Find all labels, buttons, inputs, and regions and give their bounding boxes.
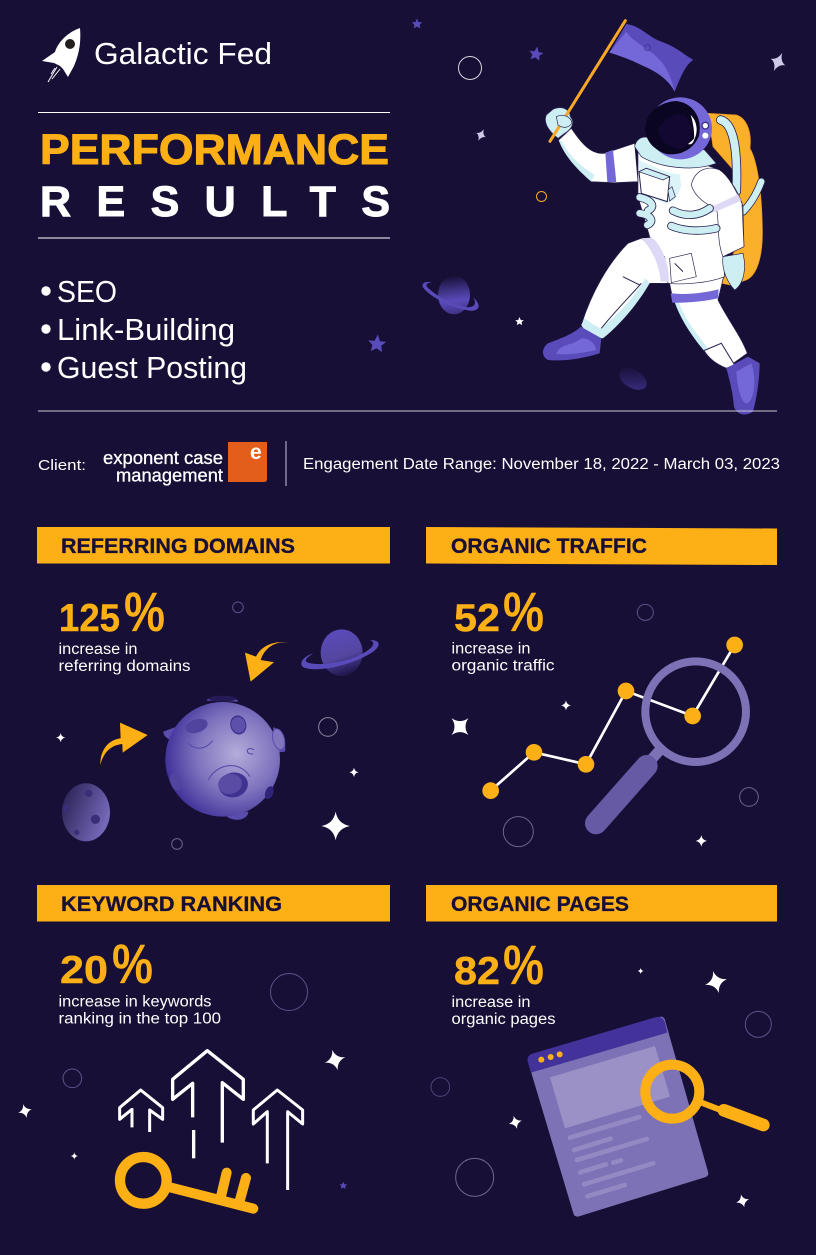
service list: Guest Posting	[57, 350, 247, 385]
client logo: exponent case management	[103, 441, 267, 486]
front boot	[543, 327, 601, 360]
illustration: astronaut	[543, 21, 762, 414]
heading	[426, 527, 777, 565]
line chart with magnifier	[443, 604, 758, 847]
fingers	[556, 115, 572, 127]
description: ranking in the top 100	[58, 1010, 221, 1028]
rising arrows	[120, 1051, 303, 1190]
stat: 20%: 20	[60, 949, 108, 992]
stat: 20%	[60, 932, 153, 995]
page body	[532, 1021, 704, 1213]
client logo: exponent case management: management	[116, 466, 223, 486]
panel: organic pages	[426, 885, 777, 1213]
title	[40, 126, 390, 226]
air tubes	[721, 120, 737, 192]
service list	[41, 274, 247, 385]
stat: 125%	[59, 580, 165, 643]
sparkles	[56, 733, 359, 840]
torso	[638, 147, 744, 284]
description: increase in	[58, 641, 138, 658]
small circles	[503, 604, 758, 847]
stat: 52%	[454, 580, 544, 643]
arrow: from asteroid	[100, 723, 148, 765]
illustration: web page with magnifier	[431, 968, 771, 1213]
heading: ORGANIC PAGES	[451, 893, 629, 916]
client row	[38, 441, 780, 486]
raised arm	[559, 128, 638, 183]
heading: KEYWORD RANKING	[61, 893, 282, 916]
logo: Galactic Fed	[42, 28, 272, 82]
description: organic pages	[452, 1011, 556, 1028]
client label: Client:	[38, 457, 86, 474]
chest straps	[640, 197, 716, 231]
sparkles	[507, 968, 751, 1209]
sparkles	[16, 1047, 348, 1189]
logo wordmark: Galactic Fed	[94, 36, 272, 71]
stat: 52%: %	[503, 580, 544, 643]
small asteroid	[62, 783, 110, 841]
back leg	[670, 275, 747, 368]
sparkles	[443, 700, 707, 847]
heading: REFERRING DOMAINS	[61, 535, 295, 558]
stat: 82%: %	[503, 933, 544, 996]
panel: organic traffic	[426, 527, 777, 847]
icon: magnifier	[645, 1065, 763, 1125]
faint planet	[616, 364, 650, 394]
service list: SEO	[57, 274, 117, 309]
moon	[163, 696, 287, 820]
ringed planet	[301, 629, 379, 676]
collar	[635, 137, 716, 168]
backpack	[708, 113, 762, 285]
flag	[609, 24, 693, 92]
title: PERFORMANCE	[40, 126, 389, 174]
lower glove	[723, 253, 745, 290]
description	[58, 641, 191, 675]
illustration: arrows and key	[16, 1047, 348, 1209]
arrow: from planet	[245, 642, 292, 682]
illustration: planets and arrows	[56, 602, 379, 849]
page header	[528, 1017, 667, 1073]
icon: key	[120, 1157, 253, 1209]
stat: 125%: 125	[59, 597, 120, 640]
page text lines	[570, 1117, 653, 1196]
stat: 82%: 82	[454, 950, 500, 993]
stat: 52%: 52	[454, 597, 500, 640]
front leg	[581, 238, 668, 338]
description	[452, 640, 555, 674]
panel: referring domains	[37, 527, 390, 849]
chest box	[639, 168, 670, 202]
small circles	[431, 1011, 771, 1196]
description	[58, 994, 221, 1028]
stat: 125%: %	[124, 580, 165, 643]
stat: 82%	[454, 933, 544, 996]
description: increase in	[452, 640, 530, 658]
client logo: exponent case management: exponent case	[103, 448, 223, 468]
decorative space items, top	[367, 18, 789, 352]
helmet	[649, 97, 712, 159]
description	[452, 994, 556, 1028]
description: increase in	[452, 994, 530, 1011]
icon: ringed planet, top	[423, 276, 479, 314]
description: organic traffic	[452, 658, 555, 674]
flag pole	[550, 21, 625, 141]
icon: rocket	[42, 28, 80, 82]
page image	[550, 1046, 670, 1128]
heading	[37, 527, 390, 564]
heading: ORGANIC TRAFFIC	[451, 535, 647, 558]
heading	[37, 885, 390, 922]
raised glove	[545, 108, 573, 138]
service list: Link-Building	[57, 312, 235, 347]
description: increase in keywords	[58, 994, 212, 1010]
engagement date range: Engagement Date Range: November 18, 2022 - March 03, 2023	[303, 456, 780, 473]
small circles	[172, 602, 337, 849]
description: referring domains	[58, 658, 191, 675]
panel: keyword ranking	[16, 885, 390, 1209]
back boot	[726, 357, 760, 414]
heading	[426, 885, 777, 922]
stat: 20%: %	[112, 932, 153, 995]
client logo: exponent case management: e	[250, 441, 262, 464]
title: RESULTS	[40, 178, 390, 226]
